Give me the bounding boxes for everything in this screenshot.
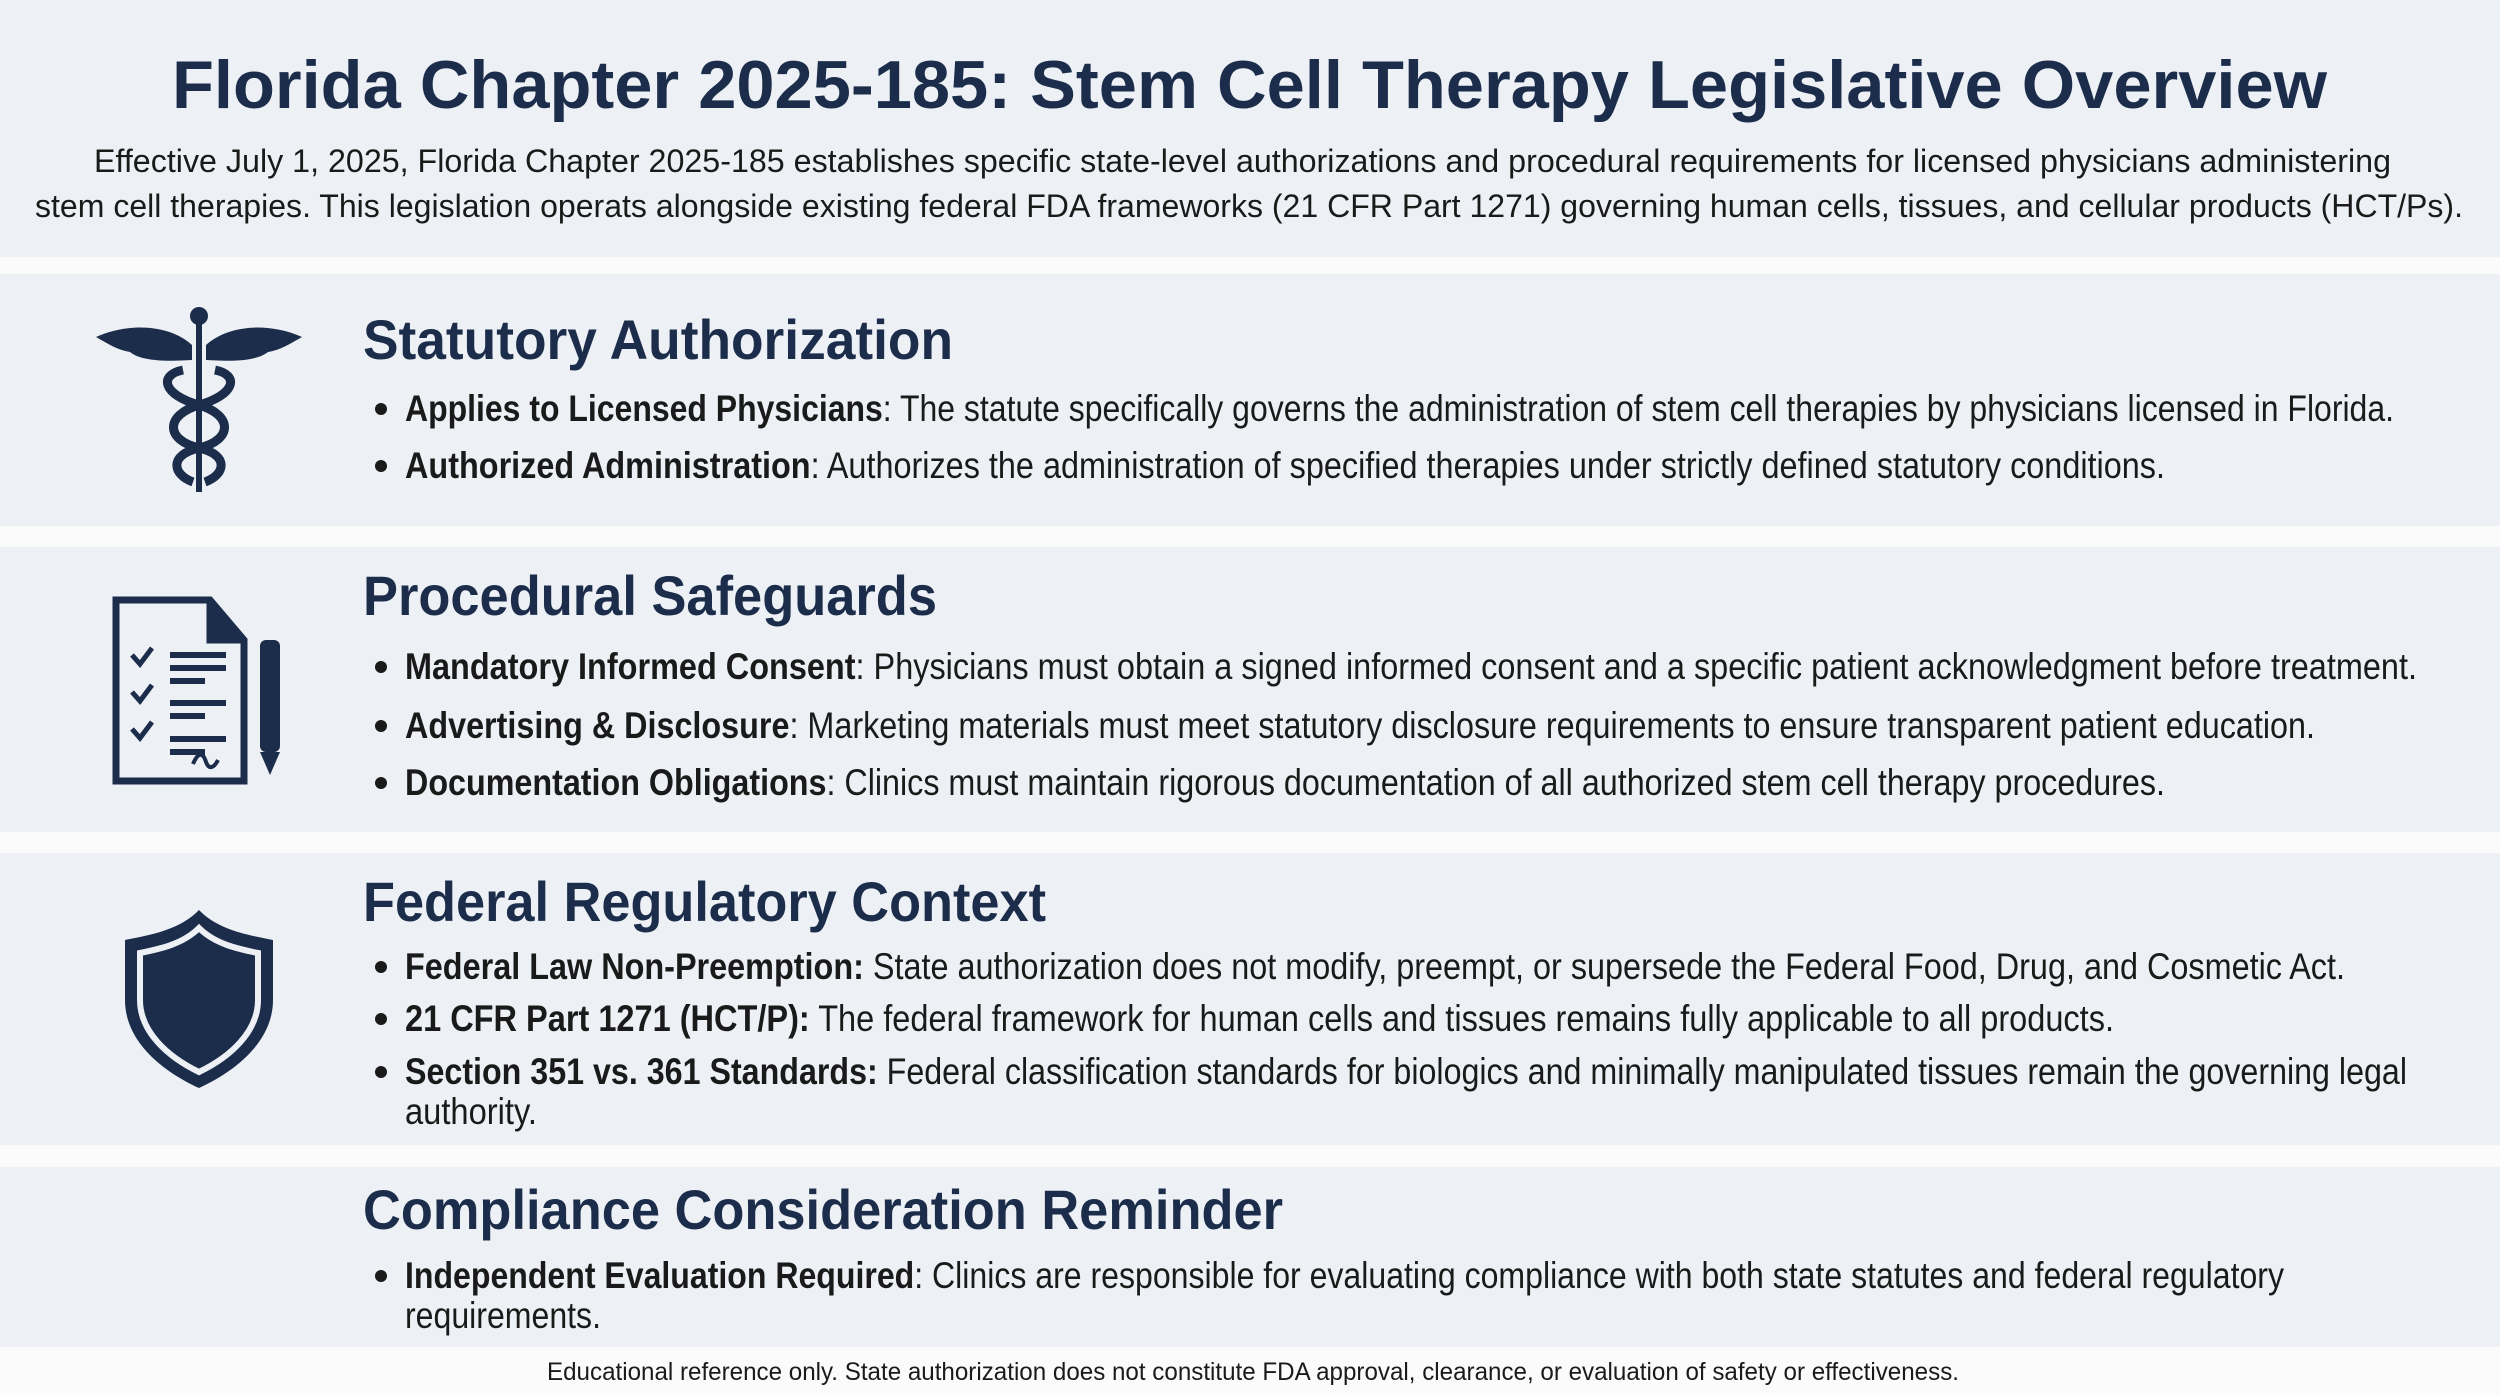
icon: shield (125, 910, 273, 1088)
bullets: Documentation Obligations: Clinics must maintain rigorous documentation of all authorized stem cell therapy procedures. (405, 762, 2165, 803)
footer disclaimer: Educational reference only. State authorization does not constitute FDA approval, clearance, or evaluation of safety or effectiveness. (547, 1358, 1959, 1386)
heading: Federal Regulatory Context (363, 870, 1046, 933)
header band (0, 0, 2500, 257)
panel: procedural safeguards (0, 547, 2500, 832)
bullets: authority. (405, 1091, 537, 1132)
subtitle (35, 143, 2463, 224)
bullets: 21 CFR Part 1271 (HCT/P): The federal framework for human cells and tissues remains fully applicable to all products. (405, 998, 2114, 1039)
panel: statutory authorization (0, 274, 2500, 526)
bullets (375, 646, 2417, 803)
bullet (375, 1255, 2284, 1336)
bullet: Independent Evaluation Required: Clinics are responsible for evaluating compliance with both state statutes and federal regulatory (405, 1255, 2284, 1296)
subtitle: Effective July 1, 2025, Florida Chapter 2025-185 establishes specific state-level authorizations and procedural requirements for licensed physicians administering (94, 143, 2391, 179)
heading: Procedural Safeguards (363, 564, 937, 627)
bullets: Authorized Administration: Authorizes the administration of specified therapies under strictly defined statutory conditions. (405, 445, 2165, 486)
bullets: Advertising & Disclosure: Marketing materials must meet statutory disclosure requirements to ensure transparent patient education. (405, 705, 2315, 746)
panel: federal regulatory context (0, 853, 2500, 1145)
subtitle: stem cell therapies. This legislation operats alongside existing federal FDA frameworks (21 CFR Part 1271) governing human cells, tissues, and cellular products (HCT/Ps). (35, 188, 2463, 224)
bullets (375, 946, 2407, 1132)
icon: document with pen (116, 600, 280, 781)
heading: Statutory Authorization (363, 308, 953, 371)
bullet: requirements. (405, 1295, 601, 1336)
bullets (375, 388, 2394, 486)
panel: compliance reminder (0, 1167, 2500, 1347)
heading: Compliance Consideration Reminder (363, 1178, 1283, 1241)
title: Florida Chapter 2025-185: Stem Cell Therapy Legislative Overview (172, 47, 2328, 123)
icon: caduceus (96, 307, 302, 492)
bullets: Federal Law Non-Preemption: State authorization does not modify, preempt, or supersede the Federal Food, Drug, and Cosmetic Act. (405, 946, 2345, 987)
